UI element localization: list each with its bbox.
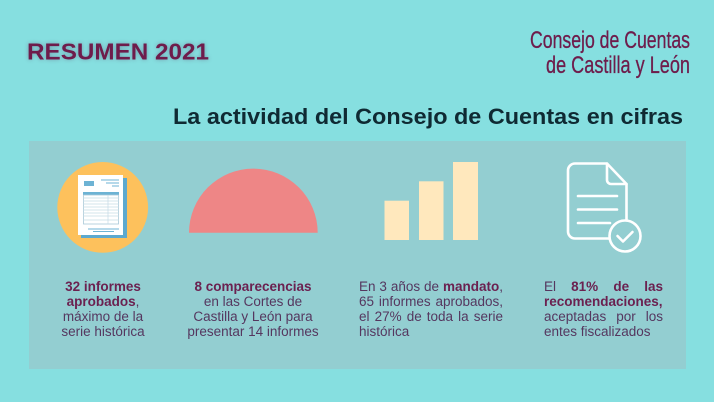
text: informes: máximo de la — [63, 309, 143, 324]
text: recomendaciones: aceptadas por los — [544, 309, 663, 324]
text: comparecencias: Castilla y León para — [193, 309, 313, 324]
text: informes: serie histórica — [61, 324, 145, 339]
text: mandato: 65 informes aprobados, — [359, 294, 503, 309]
text: mandato: En 3 años de mandato, — [359, 279, 503, 294]
text: recomendaciones: entes fiscalizados — [544, 324, 651, 339]
text: recomendaciones — [544, 279, 663, 339]
text: informes — [61, 279, 145, 339]
panel: background — [29, 141, 686, 369]
title: La actividad del Consejo de Cuentas en cifras — [173, 104, 683, 129]
text: informes: 32 informes — [65, 279, 141, 294]
text: comparecencias: presentar 14 informes — [187, 324, 319, 339]
text: recomendaciones: El 81% de las — [544, 279, 663, 294]
heading: resumen 2021: RESUMEN 2021 — [27, 38, 209, 64]
text: mandato — [359, 279, 503, 339]
text: recomendaciones: recomendaciones, — [544, 294, 663, 309]
text: mandato: el 27% de toda la serie — [359, 309, 503, 324]
text: comparecencias: en las Cortes de — [204, 294, 302, 309]
text: comparecencias: 8 comparecencias — [194, 279, 312, 294]
text: mandato: histórica — [359, 324, 409, 339]
text: comparecencias — [187, 279, 319, 339]
heading: organisation name — [530, 27, 690, 79]
text: informes: aprobados, — [67, 294, 139, 309]
